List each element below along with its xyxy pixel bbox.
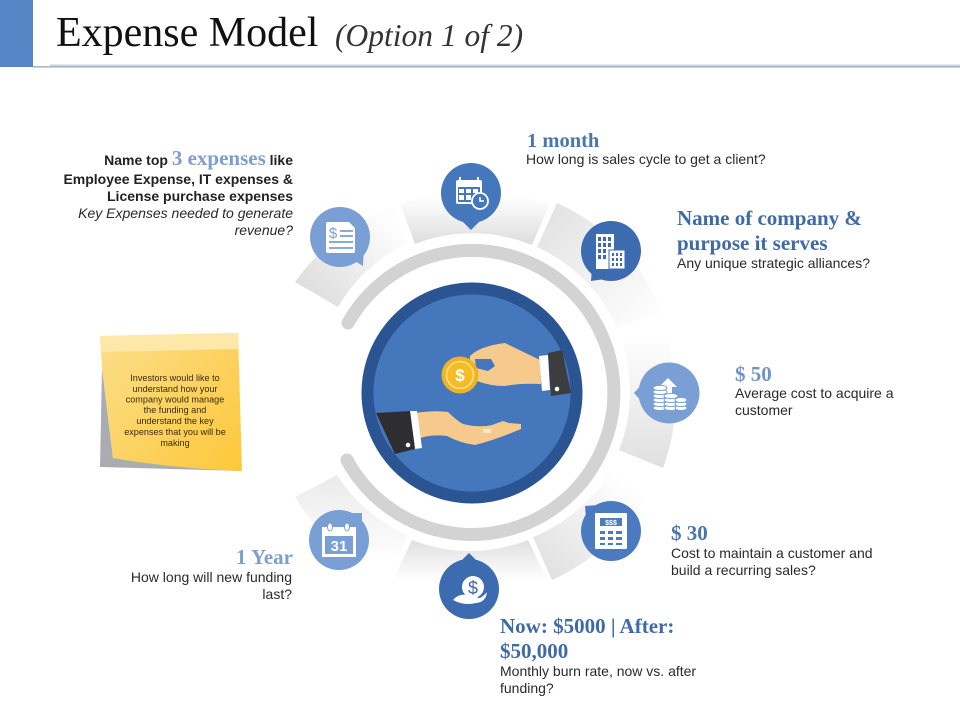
bubble: document expenses icon [310,207,370,267]
text block: company: Name of company & [677,206,862,230]
bubble: money in hand icon: $ [468,578,478,598]
bubble: calendar 31 icon: 31 [331,538,347,555]
sticky note text: the funding and [144,405,206,415]
text block: 3 expenses: Employee Expense, IT expenses & [63,171,293,187]
text block: 3 expenses: License purchase expenses [107,188,293,204]
sticky note text [124,373,226,448]
text block: 3 expenses: Name top 3 expenses like [104,146,293,170]
text block: $ 50: $ 50 [735,362,772,386]
grey open ring [347,250,614,534]
sticky note text: understand the key [136,416,214,426]
text block: 3 expenses [63,146,293,238]
text block: 3 expenses: Key Expenses needed to generate [78,205,293,221]
segmented outer ring [295,190,676,598]
text block: 1 Year: last? [262,586,292,602]
text block: $ 30: build a recurring sales? [671,562,816,578]
bubble: document expenses icon: $ [329,225,338,242]
sticky note text: making [160,438,190,448]
text block: burn rate: Monthly burn rate, now vs. after [500,663,696,679]
text block: 1 Year: How long will new funding [131,569,292,585]
bubble: calculator icon: $$$ [605,520,617,527]
text block: $ 50: customer [735,402,793,418]
header rule [33,64,960,67]
bubble: calculator icon [581,501,641,561]
title [56,10,523,56]
text block: burn rate: $50,000 [500,639,568,663]
bubble: calendar clock icon [441,163,501,230]
sticky note text: company would manage [126,394,224,404]
text block: $ 50: Average cost to acquire a [735,385,894,401]
header accent block [0,0,33,67]
text block: burn rate: Now: $5000 | After: [500,614,674,638]
text block: $ 50 [735,362,894,418]
bubble: coins with up arrow icon [634,362,700,424]
text block: burn rate: funding? [500,680,554,696]
text block: 1 Year: 1 Year [236,545,293,569]
central circle [362,282,582,504]
bubble: office buildings icon [581,221,641,281]
sticky note text: understand how your [133,384,217,394]
title: (Option 1 of 2) [335,18,523,53]
text block: 3 expenses: revenue? [235,222,293,238]
sticky note text: Investors would like to [130,373,220,383]
bubble: money in hand icon [439,553,499,619]
text block: $ 30: Cost to maintain a customer and [671,545,873,561]
text block: 1 month: How long is sales cycle to get a client? [526,151,766,167]
title: Expense Model [56,10,318,56]
icon: giving hand with coin [442,343,571,396]
text block: company [677,206,870,271]
sticky note [100,333,242,471]
bubble: calendar 31 icon [309,510,369,570]
text block: company: Any unique strategic alliances? [677,255,870,271]
text block: 1 month [526,130,766,167]
icon: giving hand with coin: $ [455,366,465,385]
icon: receiving hand [376,411,521,454]
text block: $ 30 [671,521,873,578]
text block: burn rate [500,614,696,696]
text block: 1 month: 1 month [527,130,600,152]
sticky note text: expenses that you will be [124,427,226,437]
text block: company: purpose it serves [677,231,828,255]
text block: 1 Year [131,545,293,602]
text block: $ 30: $ 30 [671,521,708,545]
